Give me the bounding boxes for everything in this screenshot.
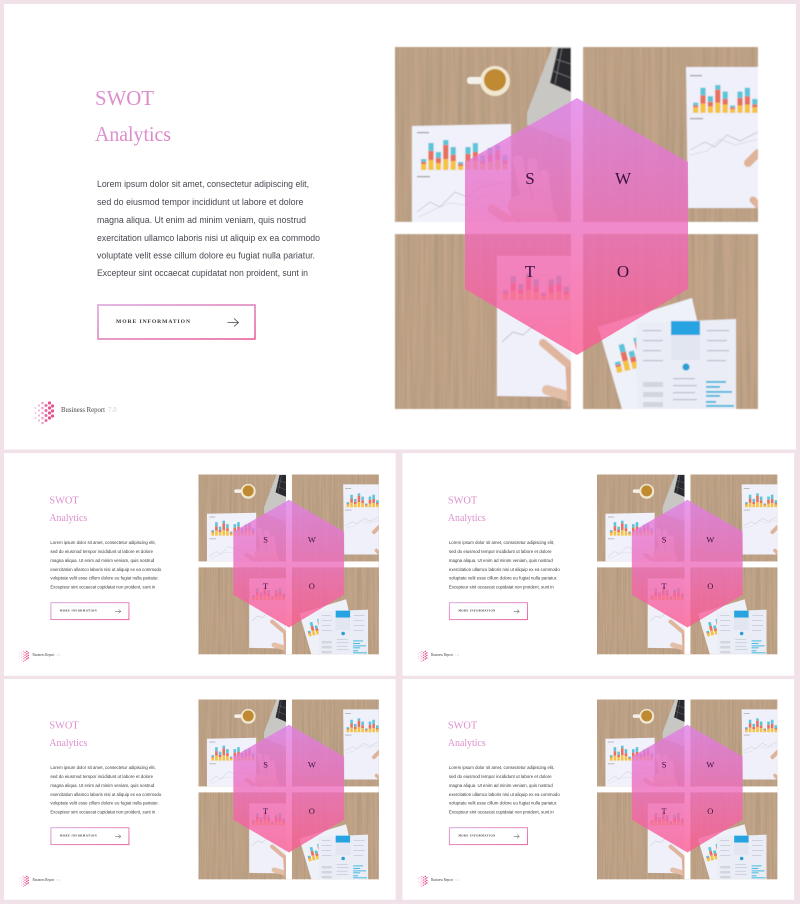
SWOT letters: O: [309, 581, 315, 591]
body text: exercitation ullamco laboris nisi ut aliquip ex ea commodo: [97, 233, 320, 243]
body text: sed do eiusmod tempor incididunt ut labore et dolore: [50, 774, 154, 779]
SWOT letters: [263, 760, 316, 816]
logo and footer: Business Report: Business Report: [61, 405, 106, 414]
logo and footer: Business Report: Business Report: [431, 653, 453, 657]
SWOT letters: W: [308, 535, 316, 545]
slide: main SWOT Analytics: [4, 4, 796, 450]
SWOT letters: T: [662, 581, 668, 591]
button: more information: [449, 828, 527, 845]
SWOT letters: T: [662, 806, 668, 816]
body text: [449, 540, 560, 589]
title: SWOT Analytics: [448, 720, 486, 749]
hexagon overlay: [233, 725, 344, 853]
SWOT letters: T: [263, 581, 269, 591]
body text: voluptate velit esse cillum dolore eu fugiat nulla pariatur.: [449, 801, 557, 806]
body text: Excepteur sint occaecat cupidatat non proident, sunt in: [449, 584, 554, 589]
body text: Lorem ipsum dolor sit amet, consectetur adipiscing elit,: [50, 540, 156, 545]
button: more information: [51, 603, 129, 620]
body text: Excepteur sint occaecat cupidatat non proident, sunt in: [50, 584, 156, 589]
button: more information: MORE INFORMATION: [116, 319, 190, 325]
body text: Lorem ipsum dolor sit amet, consectetur adipiscing elit,: [449, 765, 554, 770]
body text: sed do eiusmod tempor incididunt ut labore et dolore: [50, 549, 154, 554]
body text: exercitation ullamco laboris nisi ut aliquip ex ea commodo: [50, 567, 162, 572]
SWOT letters: W: [706, 760, 714, 770]
body text: Excepteur sint occaecat cupidatat non proident, sunt in: [97, 268, 308, 278]
body text: [97, 179, 320, 278]
SWOT letters: [263, 535, 316, 591]
SWOT letters: S: [525, 169, 535, 188]
body text: sed do eiusmod tempor incididunt ut labore et dolore: [97, 197, 304, 207]
title: SWOT Analytics: Analytics: [448, 738, 486, 749]
button: more information: MORE INFORMATION: [458, 610, 495, 613]
slide: small copy top right: [402, 453, 794, 676]
logo and footer: Business Report: [34, 401, 117, 424]
slide: small copy bottom right: [402, 679, 794, 900]
logo and footer: Business Report: 7.0: [454, 653, 459, 657]
title: SWOT Analytics: Analytics: [49, 738, 87, 749]
photo: desk with charts, split in four panels: [395, 47, 780, 409]
title: SWOT Analytics: SWOT: [95, 86, 154, 110]
button: more information: [98, 305, 255, 339]
title: SWOT Analytics: Analytics: [95, 122, 171, 146]
hexagon overlay: [632, 725, 743, 853]
body text: voluptate velit esse cillum dolore eu fugiat nulla pariatur.: [449, 576, 557, 581]
SWOT letters: W: [615, 169, 632, 188]
button: more information: [449, 603, 527, 620]
SWOT letters: O: [707, 581, 713, 591]
SWOT letters: S: [263, 760, 268, 770]
body text: magna aliqua. Ut enim ad minim veniam, quis nostrud: [50, 558, 155, 563]
SWOT letters: [662, 535, 714, 591]
body text: [449, 765, 560, 814]
SWOT letters: T: [263, 806, 269, 816]
photo: desk with charts: [199, 474, 390, 654]
SWOT letters: S: [662, 760, 667, 770]
hexagon overlay: [632, 500, 743, 628]
title: SWOT Analytics: SWOT: [49, 720, 79, 731]
button: more information: [51, 828, 129, 845]
logo and footer: Business Report: [19, 651, 60, 662]
body text: sed do eiusmod tempor incididunt ut labore et dolore: [449, 549, 552, 554]
title: SWOT Analytics: SWOT: [49, 495, 79, 506]
slide: small copy top left: [4, 453, 396, 676]
title: SWOT Analytics: [95, 86, 171, 146]
button: more information: MORE INFORMATION: [60, 835, 97, 838]
body text: Lorem ipsum dolor sit amet, consectetur adipiscing elit,: [50, 765, 156, 770]
body text: [50, 765, 162, 814]
body text: exercitation ullamco laboris nisi ut aliquip ex ea commodo: [50, 792, 162, 797]
body text: [50, 540, 162, 589]
body text: Lorem ipsum dolor sit amet, consectetur adipiscing elit,: [97, 179, 309, 189]
body text: magna aliqua. Ut enim ad minim veniam, quis nostrud: [449, 783, 553, 788]
body text: sed do eiusmod tempor incididunt ut labore et dolore: [449, 774, 552, 779]
logo and footer: Business Report: [19, 876, 60, 887]
hexagon overlay: [233, 500, 344, 628]
photo: desk with charts: [597, 699, 788, 879]
button: more information: MORE INFORMATION: [60, 610, 97, 613]
title: SWOT Analytics: SWOT: [448, 720, 478, 731]
hexagon overlay: [465, 98, 688, 355]
SWOT letters: [662, 760, 714, 816]
logo and footer: Business Report: 7.0: [108, 406, 117, 414]
title: SWOT Analytics: [49, 495, 87, 524]
body text: Lorem ipsum dolor sit amet, consectetur adipiscing elit,: [449, 540, 554, 545]
SWOT letters: S: [263, 535, 268, 545]
body text: Excepteur sint occaecat cupidatat non proident, sunt in: [50, 809, 156, 814]
SWOT letters: T: [525, 262, 536, 281]
title: SWOT Analytics: SWOT: [448, 495, 478, 506]
body text: magna aliqua. Ut enim ad minim veniam, quis nostrud: [97, 215, 306, 225]
body text: voluptate velit esse cillum dolore eu fugiat nulla pariatur.: [50, 576, 159, 581]
logo and footer: Business Report: 7.0: [56, 878, 60, 882]
SWOT letters: [525, 169, 632, 281]
logo and footer: Business Report: Business Report: [431, 878, 453, 882]
logo and footer: Business Report: 7.0: [56, 653, 60, 657]
SWOT letters: W: [706, 535, 714, 545]
SWOT letters: S: [662, 535, 667, 545]
photo: desk with charts: [597, 474, 788, 654]
logo and footer: Business Report: Business Report: [33, 653, 54, 657]
SWOT letters: O: [309, 806, 315, 816]
slide: small copy bottom left: [4, 679, 396, 900]
body text: magna aliqua. Ut enim ad minim veniam, quis nostrud: [449, 558, 553, 563]
body text: exercitation ullamco laboris nisi ut aliquip ex ea commodo: [449, 792, 560, 797]
logo and footer: Business Report: Business Report: [33, 878, 54, 882]
SWOT letters: O: [707, 806, 713, 816]
body text: magna aliqua. Ut enim ad minim veniam, quis nostrud: [50, 783, 155, 788]
body text: voluptate velit esse cillum dolore eu fugiat nulla pariatur.: [97, 250, 315, 260]
SWOT letters: O: [617, 262, 629, 281]
title: SWOT Analytics: Analytics: [448, 513, 486, 524]
logo and footer: Business Report: [418, 876, 459, 887]
SWOT letters: W: [308, 760, 316, 770]
body text: Excepteur sint occaecat cupidatat non proident, sunt in: [449, 809, 554, 814]
photo: desk with charts: [199, 699, 390, 879]
logo and footer: Business Report: [418, 651, 459, 662]
logo and footer: Business Report: 7.0: [454, 878, 459, 882]
body text: voluptate velit esse cillum dolore eu fugiat nulla pariatur.: [50, 801, 159, 806]
title: SWOT Analytics: [49, 720, 87, 749]
button: more information: MORE INFORMATION: [458, 835, 495, 838]
title: SWOT Analytics: [448, 495, 486, 524]
title: SWOT Analytics: Analytics: [49, 513, 87, 524]
body text: exercitation ullamco laboris nisi ut aliquip ex ea commodo: [449, 567, 560, 572]
